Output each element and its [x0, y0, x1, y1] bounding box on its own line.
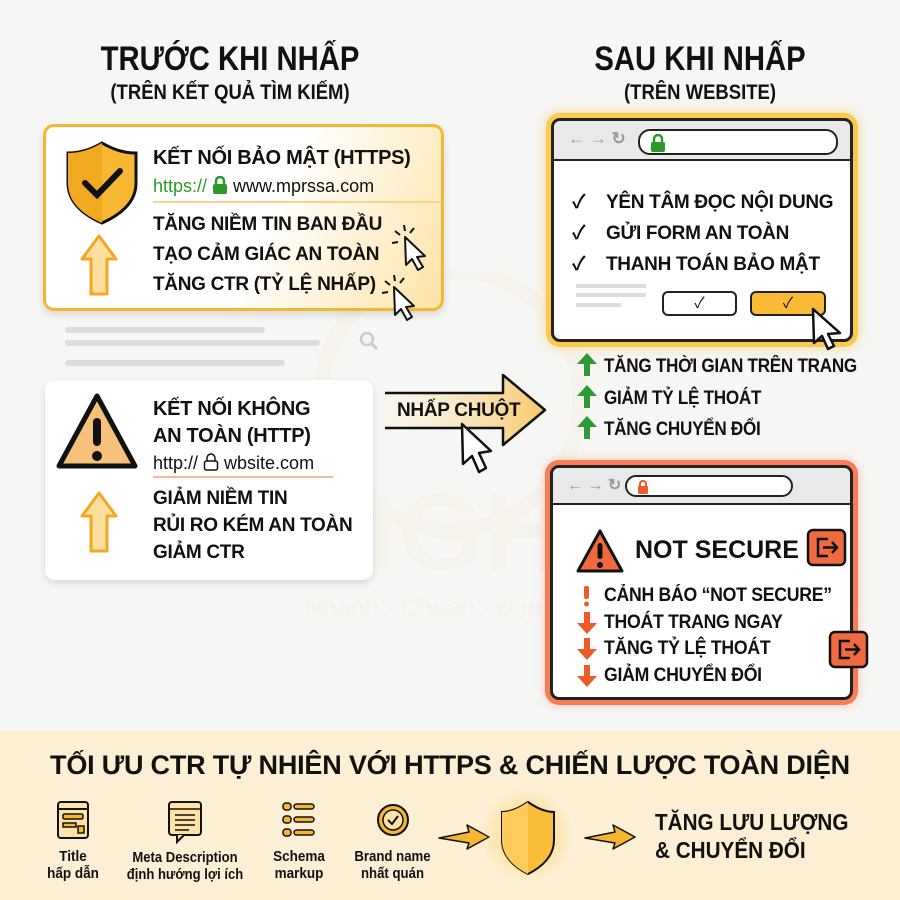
item: schema: [273, 802, 325, 882]
list: positive outcomes: GIẢM TỶ LỆ THOÁT: [604, 388, 761, 408]
benefits: [153, 212, 382, 295]
panel: http search result: [45, 380, 373, 580]
icon: up arrow: [80, 234, 118, 296]
toolbar: ← → ↻: [568, 129, 626, 148]
search result lines: [65, 327, 265, 333]
item: schema: Schema: [273, 848, 325, 865]
item: title: [47, 801, 99, 882]
risks: GIẢM NIỀM TIN: [153, 488, 287, 509]
buttons: [662, 291, 737, 316]
arrow: click: [385, 374, 546, 474]
icon: exit 2: [828, 630, 868, 668]
browser: not secure: [550, 465, 853, 700]
heading: NOT SECURE: [635, 536, 799, 564]
icon: shield: [66, 141, 138, 225]
arrow: [584, 824, 636, 850]
heading: [153, 396, 311, 447]
icon: up arrow: [80, 491, 118, 552]
list: negative: THOÁT TRANG NGAY: [604, 612, 782, 632]
item: brand: Brand name: [354, 848, 431, 865]
item: meta: Meta Description: [132, 849, 238, 866]
panel: https search result: [43, 124, 444, 311]
list: positive outcomes: TĂNG CHUYỂN ĐỔI: [604, 419, 761, 440]
heading: KẾT NỐI BẢO MẬT (HTTPS): [153, 147, 411, 169]
list: positive outcomes: TĂNG THỜI GIAN TRÊN TRANG: [604, 356, 857, 377]
toolbar: [554, 121, 850, 161]
list: negative: CẢNH BÁO “NOT SECURE”: [604, 585, 832, 606]
heading: KẾT NỐI KHÔNG: [153, 398, 310, 420]
browser: secure: [551, 118, 853, 342]
item: brand: [354, 804, 431, 882]
toolbar: ← → ↻: [567, 477, 621, 494]
icon: warning red: [576, 529, 624, 572]
item: title: hấp dẫn: [47, 865, 99, 882]
label: NHẤP CHUỘT: [397, 400, 520, 421]
icon: exit: [806, 528, 846, 566]
arrow: [438, 824, 490, 850]
heading: AN TOÀN (HTTP): [153, 425, 311, 447]
list: negative: [604, 584, 832, 686]
watermark: Nhanh - Chuẩn - Đẹp: [305, 594, 542, 621]
list: negative: TĂNG TỶ LỆ THOÁT: [604, 638, 770, 659]
checklist: ✓: [572, 254, 585, 275]
watermark: LIGHT: [300, 471, 630, 594]
title: before: (TRÊN KẾT QUẢ TÌM KIẾM): [110, 81, 350, 104]
title: after: [594, 40, 806, 104]
url: http:// wbsite.com: [153, 453, 314, 473]
list: negative: GIẢM CHUYỂN ĐỔI: [604, 664, 762, 686]
item: meta: [127, 801, 243, 883]
title: before: [100, 40, 359, 104]
benefits: TẠO CẢM GIÁC AN TOÀN: [153, 244, 379, 265]
item: brand: nhất quán: [361, 865, 424, 882]
item: meta: định hướng lợi ích: [127, 866, 243, 883]
result text: & CHUYỂN ĐỔI: [655, 837, 806, 863]
list: positive outcomes: [577, 353, 857, 440]
title: after: (TRÊN WEBSITE): [624, 81, 776, 104]
checklist: THANH TOÁN BẢO MẬT: [606, 254, 820, 275]
watermark: [300, 270, 630, 621]
icon: cursor: [460, 422, 492, 474]
icon: cursors: [382, 224, 426, 321]
panel: bottom strategy: [0, 730, 900, 900]
risks: [153, 486, 352, 563]
browser: secure: ✓: [783, 295, 793, 312]
checklist: ✓: [572, 192, 585, 213]
item: schema: markup: [275, 865, 323, 882]
checklist: [572, 190, 833, 275]
risks: RỦI RO KÉM AN TOÀN: [153, 515, 352, 536]
checklist: YÊN TÂM ĐỌC NỘI DUNG: [606, 192, 833, 213]
benefits: TĂNG NIỀM TIN BAN ĐẦU: [153, 214, 382, 235]
icon: shield glow: [482, 785, 572, 885]
heading: TỐI ƯU CTR TỰ NHIÊN VỚI HTTPS & CHIẾN LƯỢC TOÀN DIỆN: [50, 750, 850, 780]
result text: TĂNG LƯU LƯỢNG: [655, 809, 848, 835]
checklist: ✓: [572, 223, 585, 244]
item: title: Title: [59, 848, 87, 865]
benefits: TĂNG CTR (TỶ LỆ NHẤP): [153, 274, 376, 295]
toolbar: [553, 468, 850, 505]
title: before: TRƯỚC KHI NHẤP: [101, 40, 359, 78]
title: after: SAU KHI NHẤP: [594, 40, 806, 78]
url: https:// www.mprssa.com: [153, 176, 374, 196]
result text: [655, 809, 848, 863]
risks: GIẢM CTR: [153, 542, 245, 563]
checklist: GỬI FORM AN TOÀN: [606, 223, 789, 244]
buttons: ✓: [694, 295, 705, 312]
icon: magnifier: [360, 332, 378, 350]
icon: warning: [56, 394, 138, 468]
